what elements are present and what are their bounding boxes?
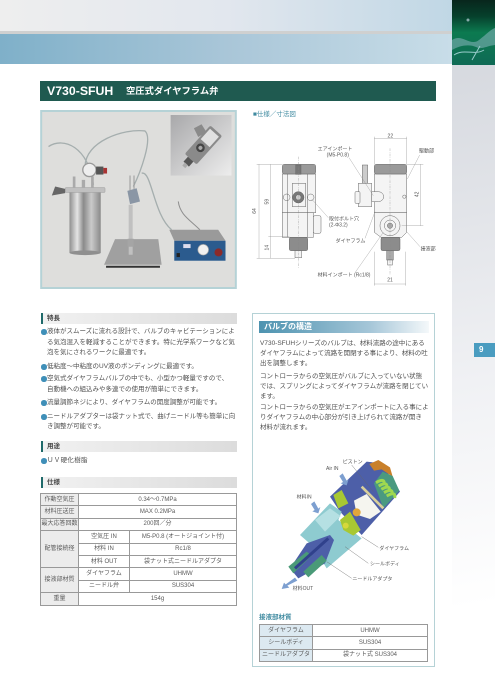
specification table: MAX 0.2MPa — [140, 509, 175, 515]
specification table: Rc1/8 — [175, 546, 191, 552]
features list: 空気式ダイヤフラムバルブの中でも、小型かつ軽量ですので、 — [47, 375, 228, 382]
drawing labels: 接液部 — [421, 246, 436, 253]
heading: wetted materials: 接液部材質 — [259, 614, 292, 621]
explanation text: コントローラからの空気圧がバルブに入っていない状態 — [260, 373, 422, 380]
dimension values: 64 — [252, 208, 258, 214]
heading: features: 特長 — [47, 315, 60, 322]
dimension drawing — [252, 133, 436, 286]
drawing labels: 取付ボルト穴 — [329, 216, 359, 223]
diagram labels: ダイヤフラム — [379, 545, 409, 552]
heading: valve structure — [259, 321, 429, 333]
diagram labels: ピストン — [343, 459, 363, 465]
features list: き調整が可能です。 — [47, 423, 105, 430]
specification table: 空気圧 IN — [91, 534, 117, 540]
valve body — [288, 460, 400, 578]
header corner image — [452, 0, 495, 65]
features list: 自動機への組込みや多連での使用が簡単にできます。 — [47, 386, 202, 393]
explanation text: コントローラからの空気圧がエアインポートに入る事によ — [260, 404, 429, 411]
title bar — [40, 81, 436, 101]
specification table: UHMW — [173, 571, 193, 577]
diagram labels — [293, 459, 409, 592]
drawing labels: エアインポート — [318, 146, 352, 153]
features list: 低粘度～中粘度のUV液のボンディングに最適です。 — [47, 363, 198, 370]
heading: valve structure: バルブの構造 — [264, 322, 312, 331]
diagram labels: 材料OUT — [293, 585, 313, 592]
diagram labels: 材料IN — [297, 493, 312, 500]
dimension values — [252, 133, 420, 284]
flow arrows — [282, 473, 349, 589]
explanation text: では、スプリングによってダイヤフラムが流路を閉じてい — [260, 383, 428, 390]
dimension values: 21 — [387, 278, 393, 284]
drawing labels: ダイヤフラム — [336, 238, 365, 245]
specification table: 材料圧送圧 — [44, 509, 74, 515]
explanation text: りダイヤフラムの中心部分が引き上げられて流路が開き — [260, 414, 422, 421]
heading: specifications: 仕様 — [47, 479, 60, 486]
diagram labels: ニードルアダプタ — [352, 576, 392, 583]
explanation text: ます。 — [260, 393, 279, 400]
drawing labels: 駆動部 — [419, 147, 434, 154]
model name: V730-SFUH — [47, 84, 113, 98]
explanation text: 出を調整します。 — [260, 360, 311, 367]
right sidebar — [452, 64, 495, 700]
specification table: 重量 — [53, 596, 66, 602]
specification table: 154g — [151, 596, 164, 602]
explanation text: V730-SFUHシリーズのバルブは、材料流路の途中にある — [260, 340, 425, 347]
features list: ニードルアダプターは袋ナット式で、曲げニードル等も簡単に向 — [47, 413, 235, 420]
features list: る気泡混入を軽減することができます。特に光学系ワークなど気 — [47, 339, 235, 346]
specification table — [40, 493, 237, 606]
diagram labels: シールボディ — [370, 561, 400, 568]
heading: specifications — [41, 477, 237, 488]
wetted materials table: UHMW — [360, 628, 380, 634]
features list: 泡を気にされるワークに最適です。 — [47, 349, 150, 356]
drawing labels — [318, 146, 436, 279]
diagram heading: ■仕様／寸法図 — [253, 111, 296, 118]
heading: application: 用途 — [47, 443, 60, 450]
heading: features — [41, 313, 237, 324]
panel: valve structure — [252, 313, 435, 667]
heading: application — [41, 441, 237, 452]
application text: ＵＶ硬化樹脂 — [47, 457, 88, 464]
wetted materials table — [259, 624, 428, 662]
wetted materials table: 袋ナット式 SUS304 — [343, 652, 397, 658]
specification table: 材料 OUT — [91, 559, 117, 565]
wetted materials table: SUS304 — [359, 640, 381, 646]
wetted materials table: ニードルアダプタ — [262, 652, 310, 658]
specification table: 0.34～0.7MPa — [138, 497, 177, 503]
specification table: 作動空気圧 — [44, 497, 74, 503]
right side view — [355, 164, 407, 265]
specification table: 配管接続径 — [44, 546, 74, 552]
explanation text: ダイヤフラムによって流路を開閉する事により、材料の吐 — [260, 350, 428, 357]
explanation text — [260, 339, 429, 431]
specification table: M5-P0.8 (オートジョイント付) — [142, 534, 224, 540]
specification table: 最大応答回数 — [41, 521, 78, 527]
dimension values: 42 — [414, 191, 420, 197]
features list: 液体がスムーズに流れる設計で、バルブのキャビテーションによ — [47, 328, 235, 335]
dimension values: 59 — [264, 199, 270, 204]
specification table: ニードル弁 — [89, 583, 119, 589]
wetted materials table: シールボディ — [268, 640, 304, 646]
features list: 流量調節ネジにより、ダイヤフラムの開度調整が可能です。 — [47, 399, 221, 406]
specification table: ダイヤフラム — [86, 571, 122, 577]
specification table: SUS304 — [172, 583, 194, 589]
left side view — [282, 164, 321, 258]
specification table: 材料 IN — [94, 546, 114, 552]
specification table: 袋ナット式ニードルアダプタ — [144, 559, 222, 565]
drawing labels: (M5-P0.8) — [327, 153, 349, 159]
dimension values: 14 — [264, 245, 270, 250]
drawing labels: (2-Φ3.2) — [329, 223, 348, 229]
diagram labels: Air IN — [326, 466, 339, 472]
page tab — [474, 343, 495, 357]
features list — [41, 327, 235, 430]
subtitle: 空圧式ダイヤフラム弁 — [126, 86, 218, 96]
dimension values: 22 — [388, 133, 393, 139]
bullet marker — [41, 329, 46, 334]
explanation text: 材料が流れます。 — [260, 424, 311, 431]
drawing labels: 材料インポート (Rc1/8) — [318, 272, 371, 279]
valve cross-section diagram — [282, 459, 409, 592]
specification table: 200回／分 — [143, 521, 172, 527]
wetted materials table: ダイヤフラム — [268, 628, 304, 634]
product photo — [40, 110, 237, 289]
page tab: 9 — [479, 345, 483, 354]
header band — [0, 0, 452, 64]
specification table: 接液部材質 — [44, 577, 74, 583]
